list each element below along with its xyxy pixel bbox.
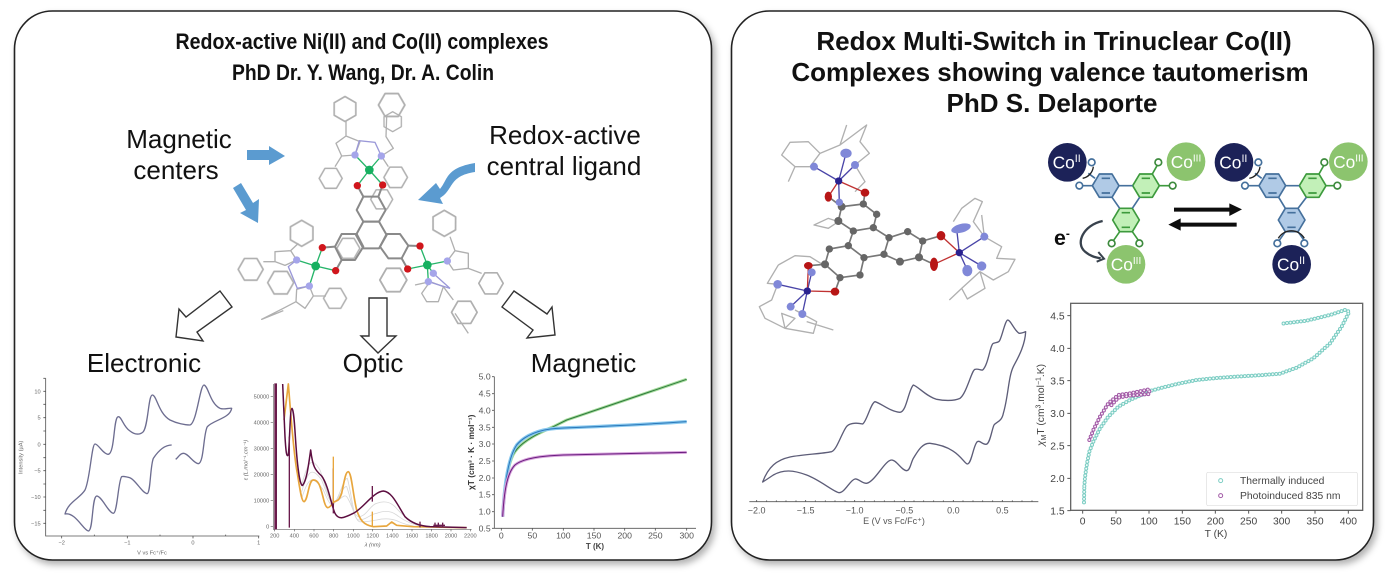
y tick labels: 2.0: [1050, 474, 1065, 485]
x tick labels: 350: [1306, 517, 1324, 528]
central redox ligand core: [322, 185, 420, 271]
molecule: trinuclear nickel complex: [238, 93, 503, 333]
heading: right panel title: PhD S. Delaporte: [947, 88, 1157, 118]
Co II right circle: II: [1241, 153, 1247, 165]
x tick labels: 150: [1174, 517, 1191, 528]
panel outline: [732, 11, 1374, 560]
voltammogram curve: [65, 385, 232, 531]
label: magnetic centers: centers: [133, 155, 219, 185]
green ring right: [1133, 163, 1172, 197]
cobalt coordination bonds: [778, 153, 984, 314]
spectra y tick labels: 20000: [254, 473, 269, 479]
equilibrium backward arrow: [1168, 218, 1237, 231]
curved electron transfer arrow: [1081, 221, 1104, 262]
magnetic x tick labels: 50: [528, 531, 537, 541]
photoinduced series: [1089, 389, 1149, 440]
x tick labels: 0.5: [996, 505, 1009, 515]
tick labels: −15: [31, 521, 41, 527]
y tick labels: 2.5: [1050, 441, 1065, 452]
atoms: oxygen: [319, 181, 424, 274]
magnetic y tick labels: 2.0: [479, 473, 491, 483]
Co II left circle: [1048, 143, 1087, 182]
x tick labels: [58, 540, 260, 546]
magnetic y tick labels: 2.5: [479, 456, 491, 466]
label: magnetic centers: Magnetic: [126, 124, 232, 154]
legend: Photoinduced 835 nm: [1240, 491, 1340, 502]
blue series: [503, 422, 687, 517]
tick labels: 5: [38, 416, 41, 422]
atoms: nitrogen: [773, 149, 988, 318]
spectra y tick labels: 40000: [254, 420, 269, 426]
x tick labels: −1.0: [846, 505, 864, 515]
y axis title: −1: [1036, 377, 1043, 385]
spectra x tick labels: 2000: [445, 533, 457, 539]
intermediate gray spectra: [302, 462, 423, 527]
spectra y axis title: ε (L.mol⁻¹.cm⁻¹): [244, 440, 250, 480]
magnetic x tick labels: 0: [499, 531, 504, 541]
label: redox-active central ligand: central ligand: [487, 151, 641, 181]
chart: cobalt cyclic voltammogram: [748, 320, 1038, 526]
x tick labels: 250: [1240, 517, 1258, 528]
magnetic x axis title: T (K): [586, 542, 604, 551]
magnetic y tick labels: 5.0: [479, 372, 491, 382]
heading: left panel title: PhD Dr. Y. Wang, Dr. A. Colin: [232, 60, 494, 85]
orange spectrum: [284, 384, 467, 528]
axis: [749, 500, 1038, 502]
label: magnetic: Magnetic: [531, 348, 636, 378]
Co II left circle: Co: [1053, 153, 1075, 173]
spectra x tick labels: 1000: [347, 533, 360, 539]
arrow: to electronic: [176, 291, 232, 341]
x tick labels: −1: [124, 540, 131, 546]
axes: [43, 378, 259, 538]
spectra x tick labels: 1800: [425, 533, 438, 539]
x tick labels: 0: [1080, 517, 1086, 528]
curve: [763, 320, 1026, 493]
right green ring: [1299, 163, 1338, 197]
x tick labels: 0: [191, 540, 195, 546]
spectra x tick labels: 200: [270, 533, 279, 539]
y axis title: χ: [1036, 440, 1047, 447]
y axis title: T (cm: [1036, 408, 1047, 435]
label: optic: Optic: [343, 348, 403, 378]
molecule: cobalt crystal structure: [759, 125, 1015, 333]
thermally induced series: [1084, 310, 1349, 502]
panel: redox-active Ni and Co complexes: [14, 11, 712, 560]
icon: blue arrow pointing right: [247, 146, 285, 165]
y axis title: .K): [1036, 364, 1047, 377]
atoms: carbon: [821, 200, 926, 281]
heading: left panel title: Redox-active Ni(II) and Co(II) complexes: [176, 29, 548, 54]
x tick labels: 0.0: [947, 505, 960, 515]
tick labels: −10: [31, 495, 41, 501]
magnetic y tick labels: 4.5: [479, 389, 491, 399]
spectra x tick labels: 2200: [464, 533, 477, 539]
tick labels: 0: [38, 442, 41, 448]
scheme: valence tautomerism: [1048, 142, 1368, 284]
magnetic y tick labels: 0.5: [479, 523, 491, 533]
magnetic x tick labels: 300: [679, 531, 694, 541]
arrow: to magnetic: [502, 291, 555, 338]
radical semiquinone arcs: [1083, 167, 1304, 238]
magnetic axes: [492, 377, 696, 531]
magnetic y tick labels: 3.0: [479, 439, 491, 449]
x tick labels: 1: [257, 540, 260, 546]
complexed chelate bonds: [288, 141, 450, 288]
spectra y tick labels: 50000: [254, 394, 269, 400]
x tick labels: 50: [1110, 517, 1122, 528]
label: redox-active central ligand: [487, 120, 641, 181]
metal–oxygen and metal–nitrogen bonds: [297, 155, 447, 286]
left triphenylene ligand: [1080, 163, 1338, 242]
purple spectrum: [283, 384, 467, 528]
spectra x tick labels: 1600: [406, 533, 418, 539]
spectra x tick labels: [270, 533, 477, 539]
magnetic y tick labels: 1.0: [479, 507, 491, 517]
y axis title: M: [1041, 434, 1048, 440]
central connecting bonds: [1112, 186, 1140, 208]
atoms: cobalt: [804, 177, 963, 295]
heading: right panel title: Redox Multi-Switch in Trinuclear Co(II): [816, 26, 1292, 56]
tick labels: [31, 389, 41, 527]
legend: Thermally induced: [1240, 476, 1325, 487]
spectra y tick labels: 10000: [254, 499, 269, 505]
Co III bottom circle left: [1107, 245, 1145, 284]
green ring bottom: [1113, 208, 1139, 242]
x tick labels: −1.5: [797, 505, 815, 515]
purple series: [503, 452, 687, 517]
Co II bottom circle right: [1272, 245, 1311, 284]
Co II bottom circle right: II: [1299, 255, 1305, 267]
y tick labels: 3.0: [1050, 409, 1065, 420]
x tick labels: 100: [1140, 517, 1158, 528]
electron label: -: [1066, 227, 1070, 241]
y tick labels: [1050, 311, 1065, 517]
Co III top circle right: [1329, 142, 1368, 181]
magnetic y tick labels: 3.5: [479, 422, 491, 432]
y axis title: 3: [1036, 404, 1043, 408]
magnetic x tick labels: 250: [648, 531, 663, 541]
green series: [503, 379, 687, 517]
panel outline: [14, 11, 712, 560]
magnetic y axis title: χT (cm³ · K · mol⁻¹): [466, 414, 476, 490]
spectra x axis title: λ (nm): [364, 542, 381, 548]
atoms: oxygen: [804, 189, 945, 296]
x tick labels: 200: [1207, 517, 1224, 528]
magnetic x tick labels: 200: [617, 531, 632, 541]
legend: [1207, 472, 1357, 506]
label: magnetic centers: [126, 124, 232, 185]
Co III bottom circle left: III: [1133, 256, 1141, 267]
Co II bottom circle right: Co: [1277, 255, 1299, 275]
plot frame: [1071, 303, 1363, 510]
y tick labels: 3.5: [1050, 376, 1065, 387]
heading: right panel title: [791, 26, 1309, 118]
spectra x tick labels: 400: [290, 533, 299, 539]
Co II left circle: II: [1075, 153, 1081, 165]
Co III top circle left: [1167, 142, 1205, 181]
x tick labels: −2.0: [748, 505, 766, 515]
right ligand rings: [1247, 173, 1286, 197]
panel: redox multi-switch in trinuclear cobalt: [732, 11, 1374, 560]
equilibrium forward arrow: [1174, 203, 1242, 216]
magnetic x tick labels: [499, 531, 694, 541]
oxygen bonds: [807, 181, 959, 292]
x tick labels: 300: [1273, 517, 1291, 528]
x axis title: E (V vs Fc/Fc⁺): [863, 516, 925, 526]
x axis title: V vs Fc⁺/Fc: [137, 549, 167, 556]
arrow: to optic: [361, 298, 396, 353]
heading: left panel title: [176, 29, 548, 85]
label: redox-active central ligand: Redox-active: [489, 120, 641, 150]
spectra axes: [271, 384, 472, 531]
ligand wireframe: [759, 125, 1015, 333]
spectra x tick labels: 600: [309, 533, 319, 539]
y axis title: Intensity (µA): [19, 440, 25, 474]
spectra x tick labels: 800: [329, 533, 338, 539]
heading: right panel title: Complexes showing valence tautomerism: [791, 57, 1309, 87]
spectra y tick labels: 0: [266, 525, 269, 531]
magnetic x tick labels: 100: [556, 531, 571, 541]
spectra x tick labels: 1400: [386, 533, 399, 539]
y axis title: .mol: [1036, 385, 1047, 405]
spectra y tick labels: 30000: [254, 447, 269, 453]
carbon framework: [808, 193, 941, 292]
Co III top circle right: Co: [1333, 152, 1355, 172]
label: electronic: Electronic: [87, 348, 201, 378]
magnetic y tick labels: 1.5: [479, 490, 491, 500]
atoms: nitrogen: [293, 151, 451, 290]
Co III top circle right: III: [1355, 153, 1364, 164]
chart: magnetic susceptibility: [466, 372, 696, 551]
x tick labels: −0.5: [895, 505, 913, 515]
spectra x tick labels: 1200: [366, 533, 379, 539]
magnetic x tick labels: 150: [587, 531, 601, 541]
atoms: nickel: [311, 166, 432, 270]
x tick labels: 400: [1340, 517, 1357, 528]
icon: curved blue arrow: [418, 163, 475, 204]
Co III bottom circle left: Co: [1111, 255, 1133, 275]
magnetic y tick labels: [479, 372, 491, 533]
chart: thermal and photoinduced susceptibility: [1036, 303, 1363, 540]
icon: blue arrow pointing down-right: [233, 183, 259, 223]
Co III top circle left: III: [1193, 153, 1201, 164]
right bottom blue ring: [1278, 186, 1306, 242]
chart: optical absorption spectra: [244, 383, 477, 548]
Co II right circle: [1215, 143, 1253, 182]
Co III top circle left: Co: [1171, 152, 1193, 172]
spectra y tick labels: [254, 394, 269, 531]
y tick labels: 4.0: [1050, 344, 1065, 355]
chart: cyclic voltammogram: [19, 378, 260, 556]
Co II right circle: Co: [1219, 153, 1241, 173]
oxygen atoms: [1076, 159, 1341, 247]
y tick labels: 4.5: [1050, 311, 1065, 322]
peripheral ligand wireframe: [238, 93, 503, 333]
tick marks: [1067, 316, 1348, 514]
blue ring left: [1080, 173, 1119, 197]
magnetic y tick labels: 4.0: [479, 405, 491, 415]
x tick labels: [748, 505, 1009, 515]
electron label: e: [1054, 226, 1066, 250]
y tick labels: 1.5: [1050, 506, 1065, 517]
tick labels: 10: [34, 389, 41, 395]
spectral artifact spikes: [276, 383, 445, 529]
x tick labels: [1080, 517, 1357, 528]
tick labels: −5: [34, 469, 41, 475]
x axis title: T (K): [1205, 529, 1227, 540]
x tick labels: −2: [58, 540, 65, 546]
